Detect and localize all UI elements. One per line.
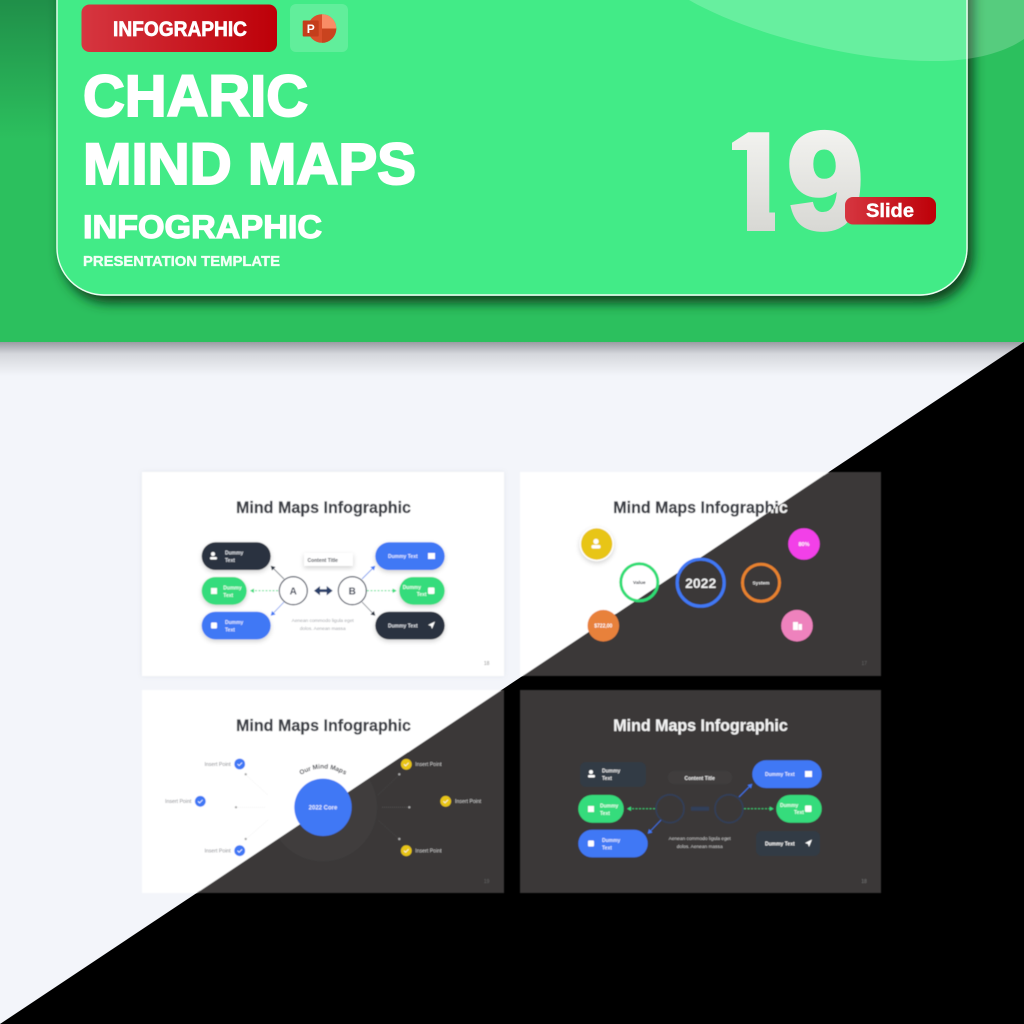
band fill	[0, 0, 1024, 342]
connector arrows	[627, 784, 774, 834]
orange price circle	[588, 610, 619, 642]
slide 4 background	[520, 690, 881, 893]
band corner shading	[0, 0, 60, 140]
pill: blue bottom left	[202, 612, 271, 639]
glossy wave	[689, 0, 1024, 61]
pill: dark top left: Text	[225, 558, 235, 564]
slide 3: core radial map	[142, 689, 504, 894]
system ring	[742, 564, 780, 601]
magenta 80 percent circle	[788, 528, 820, 560]
body text	[292, 618, 354, 632]
pill: dark top left: Dummy	[225, 550, 244, 556]
pill: green middle right: Text	[417, 592, 427, 598]
content title	[304, 553, 353, 566]
right insert points: Insert Point	[415, 762, 442, 768]
pill: blue bottom left: Dummy	[602, 838, 621, 844]
slide badge	[845, 197, 936, 224]
slide badge: Slide	[866, 201, 914, 222]
tagline: PRESENTATION TEMPLATE	[83, 253, 280, 270]
core circle: 2022 Core	[309, 805, 338, 811]
pill: blue bottom left: Text	[602, 846, 612, 852]
page number 18: 18	[861, 879, 867, 885]
right insert points	[401, 759, 482, 856]
header drop shadow	[0, 342, 1024, 376]
pill: green middle right	[399, 577, 445, 605]
left insert points: Insert Point	[204, 762, 231, 768]
slide 2: 2022 circles	[520, 472, 881, 676]
body text: Aenean commodo ligula eget	[669, 836, 731, 842]
node A: A	[290, 586, 297, 598]
pill: green middle right: Dummy	[403, 585, 421, 591]
system ring: System	[752, 580, 770, 586]
icon: powerpoint	[290, 4, 348, 52]
faint spokes	[236, 775, 409, 839]
slide 2 background	[520, 472, 881, 676]
slide 1: light mind map	[142, 472, 504, 676]
faint center nodes	[656, 795, 743, 823]
2022 ring: 2022	[685, 575, 716, 591]
main title line 2: MIND MAPS	[83, 132, 416, 197]
node A	[279, 577, 307, 605]
body text: dolos. Aenean massa	[300, 626, 346, 632]
pink document circle	[781, 610, 813, 642]
slide count number	[732, 130, 861, 232]
green header band	[0, 0, 1024, 342]
pill: blue bottom left: Text	[225, 628, 235, 634]
pill: green middle left: Dummy	[600, 804, 619, 810]
left insert points: Insert Point	[204, 848, 231, 854]
content title: Content Title	[684, 776, 715, 782]
core halo	[269, 753, 377, 861]
slide 3 background	[142, 690, 504, 893]
pill: green middle left: Text	[223, 593, 234, 599]
body text: Aenean commodo ligula eget	[292, 618, 354, 624]
2022 ring	[677, 559, 724, 606]
pill: blue top right	[752, 760, 822, 788]
left insert points	[165, 759, 245, 856]
pill: dark bottom right: Dummy Text	[765, 842, 795, 848]
content title	[668, 771, 732, 784]
slide 1 background	[142, 472, 504, 676]
connector arrows	[250, 566, 397, 616]
body text: dolos. Aenean massa	[677, 844, 723, 850]
page number 18: 18	[484, 661, 490, 667]
left insert points: Insert Point	[165, 799, 192, 805]
magenta 80 percent circle: 80%	[798, 542, 810, 548]
node B: B	[349, 586, 356, 598]
pill: green middle left	[578, 795, 624, 823]
double arrow	[314, 586, 333, 595]
slide 2 title: Mind Maps Infographic	[613, 498, 788, 517]
pill: blue top right: Dummy Text	[388, 554, 418, 560]
node B	[338, 577, 366, 605]
pill: dark bottom right: Dummy Text	[388, 624, 418, 630]
pill: blue top right	[375, 542, 445, 570]
content title: Content Title	[307, 558, 338, 564]
pill: dark top left	[202, 542, 271, 570]
slide 1 title: Mind Maps Infographic	[236, 498, 411, 517]
infographic badge: INFOGRAPHIC	[113, 18, 247, 41]
icon: powerpoint: P	[307, 22, 315, 36]
orange price circle: $722,00	[594, 624, 613, 630]
digit nine: 9	[787, 105, 863, 258]
pill: blue bottom left: Dummy	[225, 620, 244, 626]
body text	[669, 836, 731, 850]
pill: green middle left: Text	[600, 811, 610, 817]
page number 17: 17	[862, 661, 867, 667]
pill: blue top right: Dummy Text	[765, 772, 795, 778]
pill: dark top left: Dummy	[602, 768, 621, 774]
right insert points: Insert Point	[415, 848, 442, 854]
value ring: Value	[633, 580, 646, 586]
pill: green middle right: Text	[794, 810, 804, 816]
core circle	[294, 779, 352, 836]
infographic badge	[82, 4, 277, 52]
pill: dark top left: Text	[602, 776, 612, 782]
pill: dark bottom right	[375, 612, 445, 639]
slide 3 title: Mind Maps Infographic	[236, 716, 411, 735]
main title line 1: CHARIC	[83, 64, 308, 129]
black diagonal background	[0, 342, 1024, 1024]
value ring	[621, 564, 658, 601]
pill: green middle left: Dummy	[223, 586, 242, 592]
pill: dark top left	[580, 762, 646, 787]
pill: dark bottom right	[756, 831, 820, 856]
yellow person circle	[580, 527, 614, 561]
right insert points: Insert Point	[455, 799, 482, 805]
title card	[57, 0, 967, 295]
pill: green middle left	[202, 577, 247, 605]
page number 19: 19	[484, 879, 490, 885]
pill: blue bottom left	[578, 830, 648, 857]
spoke end dots	[235, 773, 410, 840]
pill: green middle right	[776, 795, 822, 823]
digit one: 1	[716, 106, 792, 259]
pill: green middle right: Dummy	[780, 803, 799, 809]
slide 4 title: Mind Maps Infographic	[613, 716, 788, 735]
slide 4: dark mind map	[520, 690, 881, 893]
subtitle: INFOGRAPHIC	[83, 209, 322, 245]
curved label: Our Mind Maps	[299, 764, 347, 775]
